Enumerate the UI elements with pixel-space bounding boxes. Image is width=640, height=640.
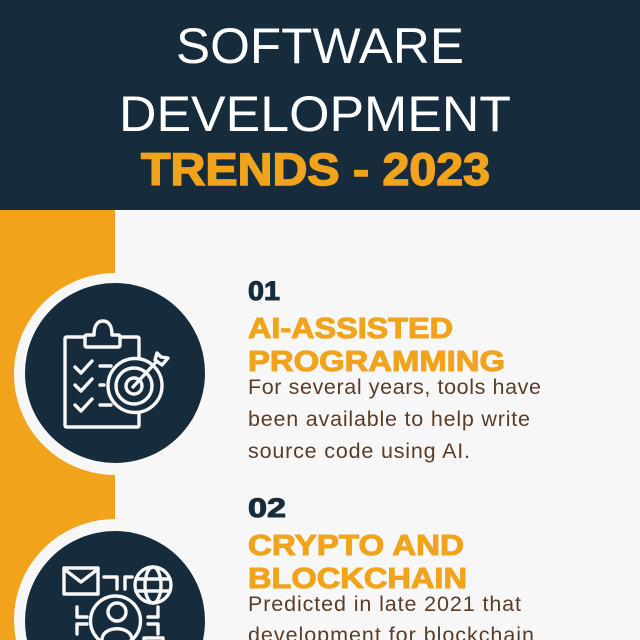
header banner: [0, 0, 640, 210]
heading AI-assisted programming: AI-ASSISTED: [248, 313, 453, 345]
number 02: 02: [248, 493, 286, 523]
title line 1: SOFTWARE: [176, 18, 464, 74]
number 01: 01: [248, 276, 280, 306]
heading crypto and blockchain: CRYPTO AND: [248, 530, 464, 562]
orange side band: [0, 210, 115, 640]
heading crypto and blockchain: BLOCKCHAIN: [248, 563, 467, 595]
body paragraph 2: Predicted in late 2021 that: [248, 592, 521, 616]
item 2 text: [248, 493, 534, 640]
heading AI-assisted programming: [248, 313, 505, 378]
body paragraph 2: [248, 592, 534, 640]
heading AI-assisted programming: PROGRAMMING: [248, 346, 505, 378]
body paragraph 1: source code using AI.: [248, 439, 470, 463]
heading crypto and blockchain: [248, 530, 467, 595]
body paragraph 1: [248, 375, 541, 463]
title line 3: TRENDS - 2023: [141, 144, 490, 195]
icon badge 1: clipboard and target: [14, 273, 216, 475]
body paragraph 1: For several years, tools have: [248, 375, 541, 399]
item 1 text: [248, 276, 541, 463]
icon badge 2: connected user: [14, 519, 216, 640]
body paragraph 1: been available to help write: [248, 407, 530, 431]
title line 2: DEVELOPMENT: [119, 86, 511, 142]
